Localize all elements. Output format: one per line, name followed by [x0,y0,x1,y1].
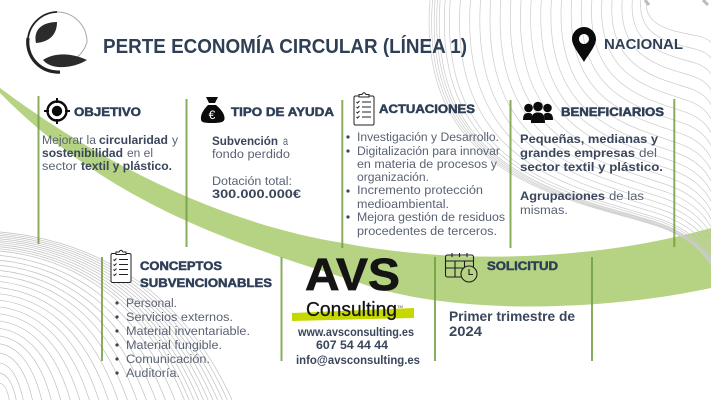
icon: circular leaf logo [28,12,87,72]
green swoosh band [0,88,711,307]
panel: conceptos subvencionables [111,250,272,380]
text: beneficiarios body: del [639,146,657,160]
text: objetivo body: Mejorar la [42,133,96,147]
list: actuaciones: en materia de procesos y [357,157,498,171]
list: actuaciones: procedentes de terceros. [357,224,497,238]
icon: clipboard checklist [354,93,374,125]
text: contact details: www.avsconsulting.es [297,325,414,339]
panel: actuaciones [346,93,505,238]
title: PERTE ECONOMÍA CIRCULAR (LÍNEA 1) [103,35,467,58]
list: conceptos: Material inventariable. [126,324,250,338]
text: tipo de ayuda body: Dotación total: [212,174,292,188]
list: actuaciones: Digitalización para innovar [357,144,500,158]
list: actuaciones [346,130,505,238]
text: solicitud body: 2024 [449,323,482,339]
icon: target [44,98,70,124]
list: conceptos: Auditoría. [126,366,180,380]
location label: NACIONAL [604,37,683,53]
logo: AVS Consulting: TM [397,304,403,309]
text: tipo de ayuda body: a [283,134,288,148]
list: conceptos: Servicios externos. [126,310,233,324]
heading: conceptos subvencionables: SUBVENCIONABLES [140,276,272,290]
text: contact details [296,325,420,367]
heading: objetivo: OBJETIVO [74,105,141,119]
text: beneficiarios body: sector textil y plástico. [520,160,663,174]
icon: money bag: € [209,108,216,122]
text: beneficiarios body: grandes empresas [520,146,635,160]
background line pattern: bottom left [0,232,232,400]
text: beneficiarios body: de las [609,189,644,203]
text: tipo de ayuda body: Subvención [212,134,278,148]
text: contact details: info@avsconsulting.es [296,353,420,367]
heading: actuaciones: ACTUACIONES [379,102,475,116]
heading: tipo de ayuda: TIPO DE AYUDA [231,105,334,119]
list: conceptos [115,296,250,380]
text: objetivo body: y [172,133,179,147]
panel: objetivo [42,98,179,173]
icon: group of people [523,102,553,123]
text: objetivo body [42,133,179,173]
text: solicitud body: Primer trimestre de [449,308,575,324]
text: beneficiarios body: Pequeñas, medianas y [520,132,658,146]
logo: AVS Consulting [292,249,414,321]
logo: AVS Consulting: Consulting [306,299,397,321]
panel: beneficiarios [520,102,664,217]
list: conceptos: Personal. [126,296,177,310]
list: conceptos: Material fungible. [126,338,222,352]
text: tipo de ayuda body: 300.000.000€ [212,187,301,201]
list: conceptos: Comunicación. [126,352,210,366]
text: beneficiarios body [520,132,663,217]
text: tipo de ayuda body [212,134,301,201]
panel: tipo de ayuda [201,97,334,201]
text: objetivo body: sector [42,159,77,173]
text: contact details: 607 54 44 44 [316,338,388,352]
text: objetivo body: sostenibilidad [42,146,123,160]
text: tipo de ayuda body: fondo perdido [212,147,290,161]
text: objetivo body: circularidad [99,133,168,147]
icon: calendar with clock [446,253,477,282]
list: actuaciones: medioambiental. [357,197,449,211]
text: objetivo body: textil y plástico. [81,159,172,173]
logo: AVS Consulting: AVS [305,249,400,300]
text: objetivo body: en el [127,146,153,160]
heading: conceptos subvencionables [140,259,272,290]
icon: map pin [572,27,596,62]
heading: solicitud: SOLICITUD [487,259,558,273]
list: actuaciones: Mejora gestión de residuos [357,210,505,224]
text: solicitud body [449,308,575,339]
heading: conceptos subvencionables: CONCEPTOS [140,259,222,273]
panel dividers [38,96,674,361]
panel: solicitud [446,253,575,339]
panel: AVS Consulting logo and contact [292,249,420,367]
heading: beneficiarios: BENEFICIARIOS [561,105,664,119]
background line pattern: top right [429,0,711,265]
list: actuaciones: Incremento protección [357,183,483,197]
list: actuaciones: organización. [357,170,429,184]
icon: clipboard checklist [111,250,131,282]
text: beneficiarios body: Agrupaciones [520,189,605,203]
list: actuaciones: Investigación y Desarrollo. [357,130,499,144]
text: beneficiarios body: mismas. [520,203,568,217]
